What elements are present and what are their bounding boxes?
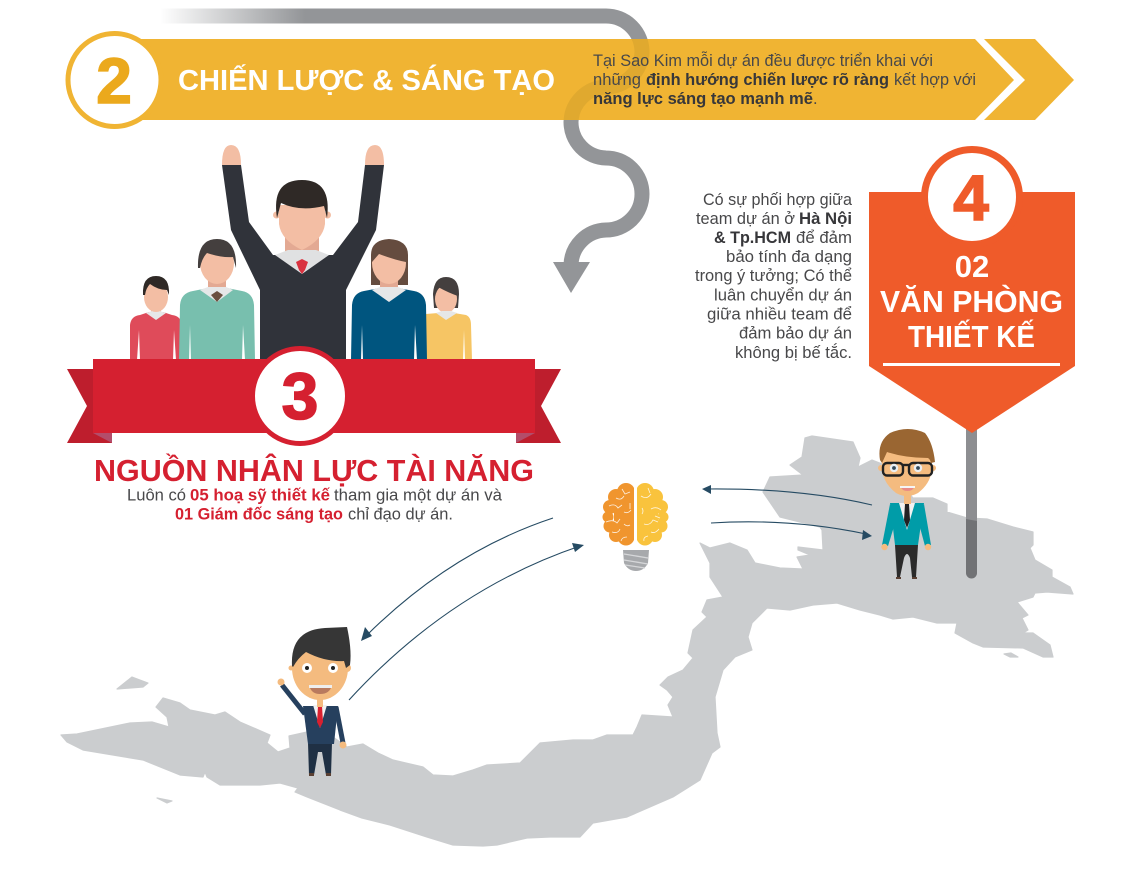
paragraph: two offices bbox=[695, 191, 853, 362]
badge 2: 2 bbox=[96, 45, 132, 117]
talent description: tham gia một dự án và bbox=[334, 486, 503, 504]
heading: strategy and creativity: CHIẾN LƯỢC & SÁNG TẠO bbox=[178, 63, 555, 97]
sign heading: VĂN PHÒNG bbox=[880, 283, 1063, 319]
paragraph: two offices: bảo tính đa dạng bbox=[726, 248, 852, 266]
banner description: . bbox=[813, 90, 818, 108]
people group bbox=[130, 145, 472, 360]
person: central man arms raised bbox=[222, 145, 384, 360]
icon: brain light bulb bbox=[602, 483, 668, 571]
paragraph: two offices: giữa nhiều team để bbox=[707, 306, 852, 324]
banner description: những bbox=[593, 71, 641, 89]
paragraph: two offices: đảm bảo dự án bbox=[739, 324, 852, 342]
paragraph: two offices: & Tp.HCM bbox=[714, 229, 791, 247]
ribbon fold left bbox=[93, 433, 112, 443]
talent description bbox=[127, 486, 503, 524]
sign panel bbox=[869, 192, 1075, 433]
arrow seen through banner bbox=[571, 16, 642, 122]
banner description: kết hợp với bbox=[894, 71, 976, 89]
badge 4 bbox=[924, 150, 1020, 244]
badge 3: 3 bbox=[282, 359, 318, 433]
talent description: Luôn có bbox=[127, 486, 186, 504]
badge 3 bbox=[252, 348, 348, 444]
arrow: up to brain bbox=[349, 543, 584, 700]
sign heading: 02 bbox=[955, 249, 989, 284]
talent description: 01 Giám đốc sáng tạo bbox=[175, 506, 343, 524]
paragraph: two offices: Hà Nội bbox=[799, 210, 852, 228]
banner description: năng lực sáng tạo mạnh mẽ bbox=[593, 90, 813, 108]
person: designer with glasses bbox=[878, 429, 936, 579]
banner description: Tại Sao Kim mỗi dự án đều được triển khai với bbox=[593, 51, 933, 70]
person: blue sweater woman bbox=[351, 239, 427, 360]
signpost: step 4 bbox=[869, 150, 1075, 433]
talent description: 05 hoạ sỹ thiết kế bbox=[190, 486, 331, 504]
ribbon fold right bbox=[516, 433, 535, 443]
ribbon right tail bbox=[516, 369, 561, 443]
person: small yellow bbox=[426, 277, 472, 360]
badge 4: 4 bbox=[953, 162, 989, 234]
arrow: man to brain top left bbox=[361, 518, 553, 641]
badge 2 bbox=[68, 34, 161, 126]
paragraph: two offices: trong ý tưởng; Có thể bbox=[695, 267, 852, 285]
banner: step 2 bbox=[66, 31, 1074, 129]
sign heading bbox=[880, 249, 1063, 354]
arrow: brain to designer bbox=[711, 522, 872, 540]
heading: talented people: NGUỒN NHÂN LỰC TÀI NĂNG bbox=[94, 452, 534, 488]
banner description bbox=[593, 51, 976, 108]
ribbon left tail bbox=[67, 369, 112, 443]
arrow: designer to brain bbox=[702, 485, 872, 505]
paragraph: two offices: để đảm bbox=[796, 229, 852, 247]
person: waving man in navy suit bbox=[278, 627, 351, 776]
map of Vietnam regions bbox=[61, 436, 1073, 846]
signpost pole bbox=[966, 425, 977, 578]
sign underline bbox=[883, 363, 1060, 366]
ribbon bbox=[67, 348, 561, 444]
person: mint sweater bbox=[179, 239, 255, 360]
talent description: chỉ đạo dự án. bbox=[348, 506, 453, 524]
paragraph: two offices: team dự án ở bbox=[696, 210, 795, 228]
paragraph: two offices: Có sự phối hợp giữa bbox=[703, 191, 853, 209]
banner body bbox=[140, 39, 1014, 120]
sign heading: THIẾT KẾ bbox=[908, 319, 1035, 354]
paragraph: two offices: luân chuyển dự án bbox=[714, 286, 852, 304]
curved gray arrow bbox=[160, 16, 642, 293]
banner description: định hướng chiến lược rõ ràng bbox=[646, 71, 889, 89]
paragraph: two offices: không bị bế tắc. bbox=[735, 343, 852, 362]
banner chevron bbox=[984, 39, 1074, 120]
ribbon body bbox=[93, 359, 535, 433]
person: small red bbox=[130, 276, 183, 360]
